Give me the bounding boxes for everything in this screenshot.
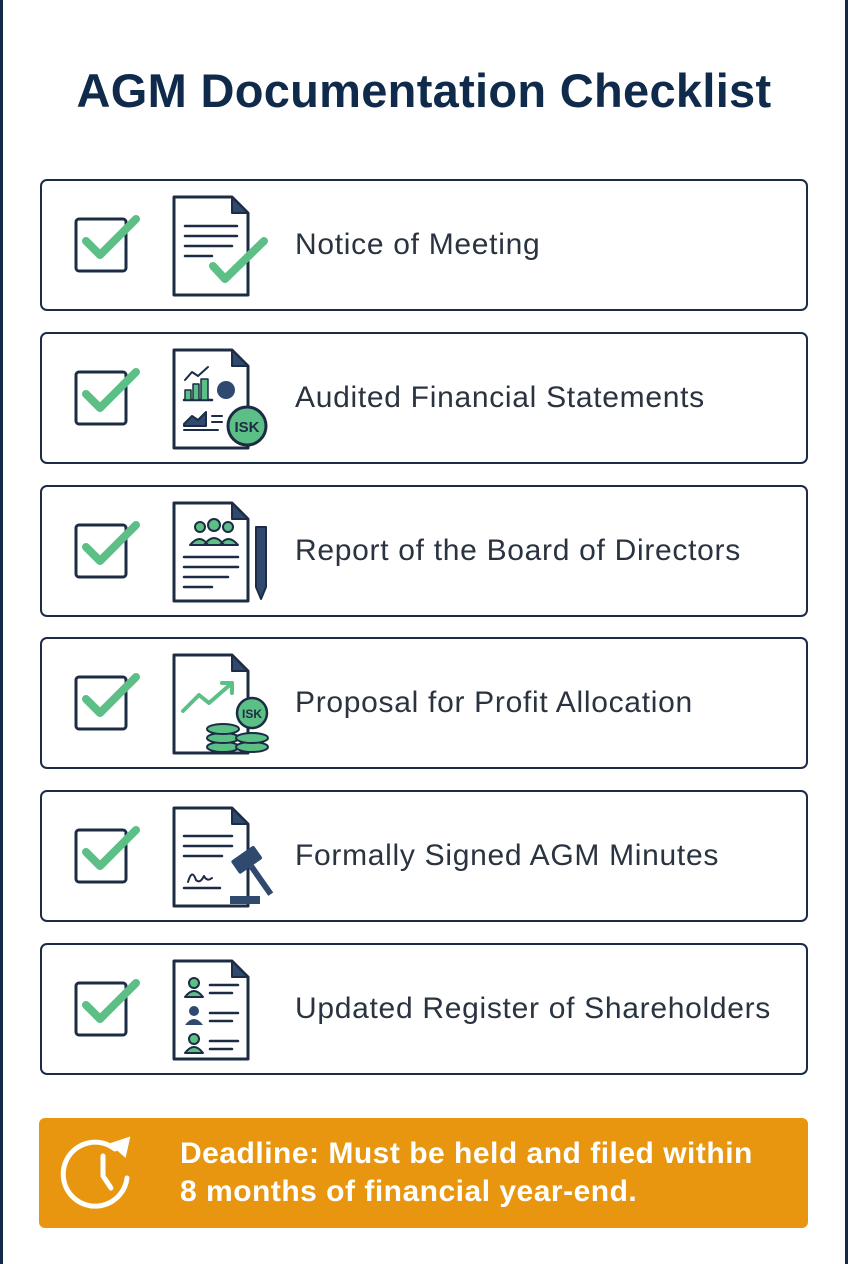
card: audited financial statements: Audited Financial Statements bbox=[295, 381, 705, 414]
card: audited financial statements bbox=[40, 332, 808, 464]
card: profit allocation: ISK bbox=[242, 707, 262, 721]
callout: deadline bbox=[39, 1118, 808, 1228]
icon: clock bbox=[60, 1136, 130, 1209]
card: report of board bbox=[40, 485, 808, 617]
card: register of shareholders bbox=[40, 943, 808, 1075]
card: profit allocation: Proposal for Profit Allocation bbox=[295, 686, 693, 719]
card: notice of meeting bbox=[40, 179, 808, 311]
card: profit allocation bbox=[40, 637, 808, 769]
card: register of shareholders: Updated Register of Shareholders bbox=[295, 992, 771, 1025]
card: report of board: Report of the Board of Directors bbox=[295, 534, 741, 567]
card: notice of meeting: Notice of Meeting bbox=[295, 228, 540, 261]
callout: deadline: Deadline: Must be held and filed within bbox=[180, 1137, 753, 1170]
callout: deadline: 8 months of financial year-end. bbox=[180, 1175, 637, 1208]
title: AGM Documentation Checklist bbox=[77, 64, 771, 117]
card: signed minutes: Formally Signed AGM Minutes bbox=[295, 839, 719, 872]
card: audited financial statements: ISK bbox=[234, 419, 260, 436]
card: signed minutes bbox=[40, 790, 808, 922]
